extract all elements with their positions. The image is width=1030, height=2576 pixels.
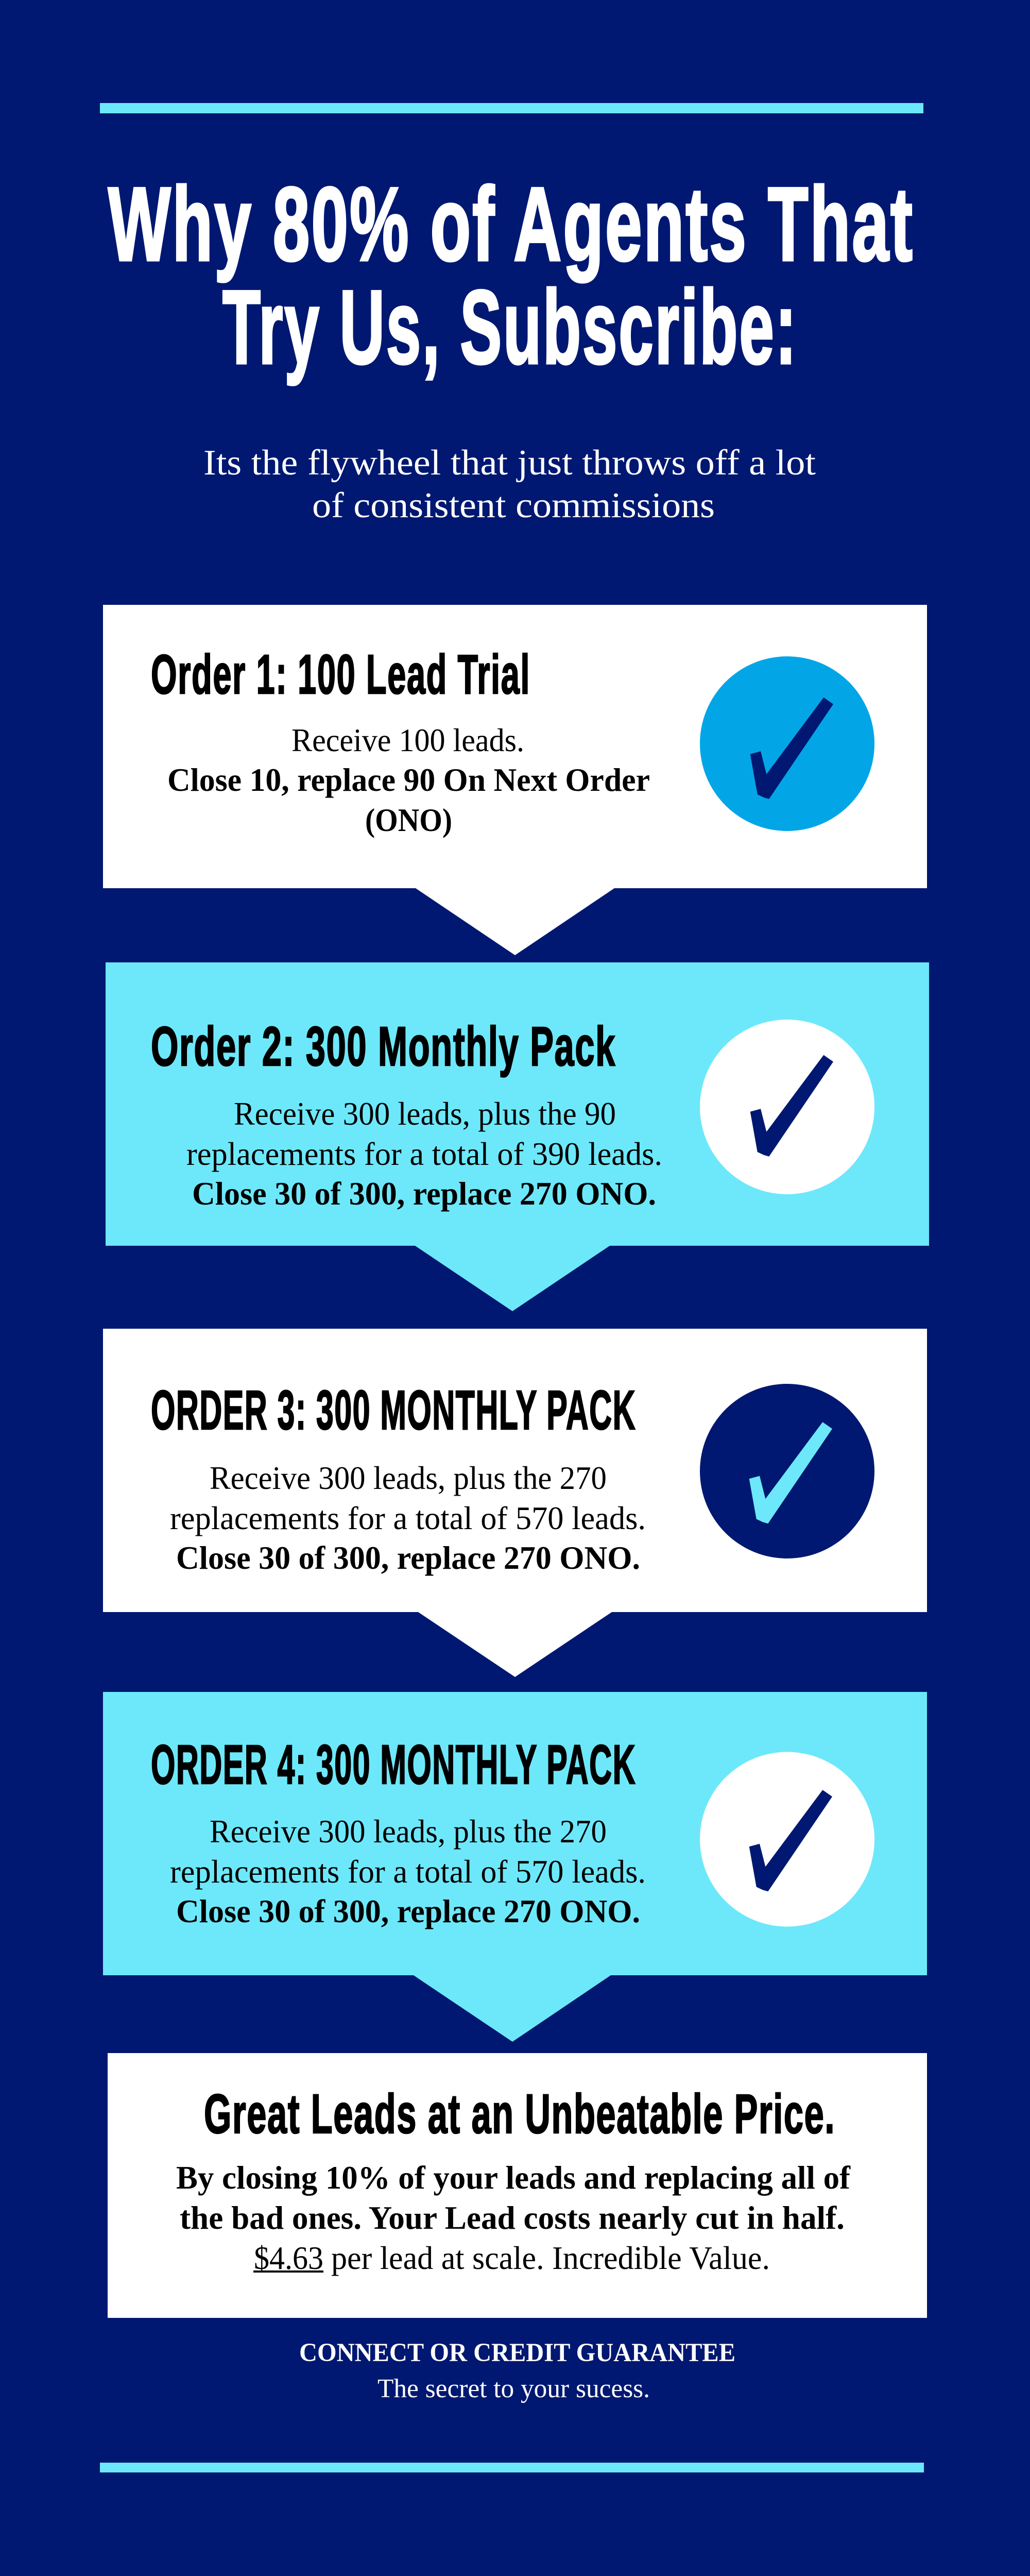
order 4 body text: Receive 300 leads, plus the 270	[210, 1814, 607, 1850]
panel: order 4	[103, 1692, 927, 2042]
order 2 body text: replacements for a total of 390 leads.	[186, 1136, 662, 1172]
summary body text	[176, 2160, 851, 2276]
order 3 body text: replacements for a total of 570 leads.	[170, 1500, 646, 1536]
order 4 heading: ORDER 4: 300 MONTHLY PACK	[151, 1733, 636, 1795]
summary body text: $4.63	[254, 2240, 323, 2276]
order 3 body text: Close 30 of 300, replace 270 ONO.	[176, 1540, 640, 1576]
panel: order 3	[103, 1329, 927, 1677]
guarantee text: The secret to your sucess.	[377, 2374, 650, 2403]
icon: checkmark in blue circle	[700, 656, 874, 831]
icon: checkmark in white circle	[700, 1020, 874, 1194]
order 2 body text: Receive 300 leads, plus the 90	[234, 1096, 616, 1132]
order 1 background with arrow	[103, 605, 927, 955]
order 2 body text: Close 30 of 300, replace 270 ONO.	[192, 1176, 656, 1212]
summary background	[108, 2053, 927, 2318]
order 3 background with arrow	[103, 1329, 927, 1677]
order 4 body text: Close 30 of 300, replace 270 ONO.	[176, 1893, 640, 1929]
order 1 body text: Receive 100 leads.	[291, 722, 524, 758]
subtitle	[203, 443, 816, 526]
subtitle: Its the flywheel that just throws off a lot	[203, 443, 816, 483]
subtitle: of consistent commissions	[312, 486, 715, 526]
panel: order 2	[106, 962, 929, 1311]
summary body text: the bad ones. Your Lead costs nearly cut in half.	[180, 2200, 845, 2236]
order 4 body text	[170, 1814, 646, 1929]
bottom accent bar	[100, 2463, 924, 2472]
order 2 heading: Order 2: 300 Monthly Pack	[151, 1015, 616, 1077]
summary body text: By closing 10% of your leads and replacing all of	[176, 2160, 851, 2196]
guarantee text	[299, 2338, 735, 2403]
order 1 body text: Close 10, replace 90 On Next Order	[167, 762, 650, 798]
order 3 body text: Receive 300 leads, plus the 270	[210, 1460, 607, 1496]
order 3 body text	[170, 1460, 646, 1576]
panel: summary	[108, 2053, 927, 2318]
icon: checkmark in white circle	[700, 1752, 874, 1927]
summary body text: per lead at scale. Incredible Value.	[331, 2240, 770, 2276]
order 4 body text: replacements for a total of 570 leads.	[170, 1854, 646, 1890]
order 1 body text	[167, 722, 650, 838]
top accent bar	[100, 103, 923, 113]
order 2 background with arrow	[106, 962, 929, 1311]
order 1 body text: (ONO)	[365, 802, 452, 838]
order 3 heading: ORDER 3: 300 MONTHLY PACK	[151, 1379, 636, 1441]
order 2 body text	[186, 1096, 662, 1212]
title	[108, 166, 914, 386]
order 1 heading: Order 1: 100 Lead Trial	[151, 643, 530, 705]
guarantee text: CONNECT OR CREDIT GUARANTEE	[299, 2338, 735, 2367]
icon: cyan checkmark in navy circle	[700, 1384, 874, 1558]
order 4 background with arrow	[103, 1692, 927, 2042]
panel: order 1	[103, 605, 927, 955]
